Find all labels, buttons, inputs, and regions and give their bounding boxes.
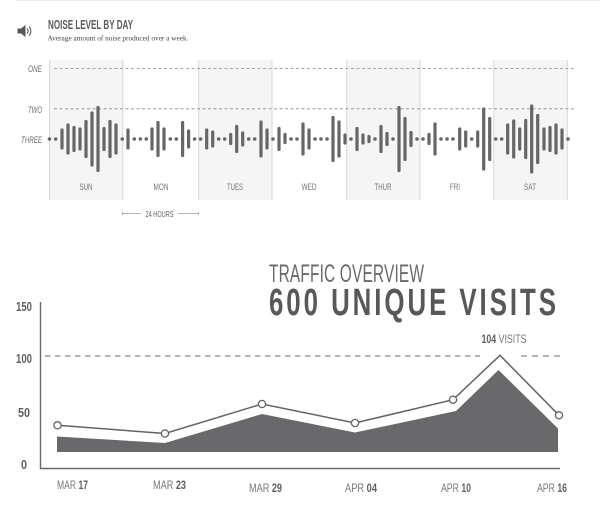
x axis labels: MAR 23 xyxy=(153,478,186,492)
area series xyxy=(57,370,558,452)
heading: noise level by day: NOISE LEVEL BY DAY xyxy=(48,18,133,32)
y axis labels: 0 xyxy=(21,457,27,472)
day labels: MON xyxy=(154,182,169,193)
line and area chart xyxy=(16,299,567,495)
panel: noise level by day xyxy=(18,18,574,219)
noise level labels xyxy=(21,64,42,146)
shaded day columns xyxy=(49,60,567,200)
x axis labels xyxy=(57,478,567,495)
line series xyxy=(58,355,559,434)
day labels: SAT xyxy=(524,182,536,193)
noise level labels: ONE xyxy=(28,64,42,75)
title: 600 unique visits: 600 UNIQUE VISITS xyxy=(269,281,556,323)
panel: traffic overview xyxy=(16,260,567,495)
scale: 24 hours: 24 HOURS xyxy=(146,209,174,219)
waveform bars xyxy=(62,106,562,172)
callout: 104 visits: 104 VISITS xyxy=(482,332,526,346)
noise level labels: TWO xyxy=(28,105,42,116)
y axis labels: 150 xyxy=(16,299,32,314)
x axis labels: APR 04 xyxy=(345,481,377,495)
reference line at 100 xyxy=(45,355,560,357)
day labels: WED xyxy=(302,182,317,193)
subtitle: Average amount of noise produced over a week. xyxy=(48,34,189,42)
x axis labels: MAR 17 xyxy=(57,478,88,492)
scale: 24 hours xyxy=(122,209,198,219)
y axis labels: 100 xyxy=(16,351,32,366)
icon: speaker xyxy=(18,25,31,37)
data points xyxy=(54,396,563,437)
y axis labels: 50 xyxy=(18,405,30,420)
day labels: TUES xyxy=(227,182,243,193)
day labels xyxy=(80,182,536,193)
waveform dots xyxy=(48,137,570,141)
noise level labels: THREE xyxy=(21,135,42,146)
x axis labels: APR 16 xyxy=(537,481,567,495)
x axis labels: MAR 29 xyxy=(249,481,282,495)
x axis labels: APR 10 xyxy=(441,481,471,495)
day labels: FRI xyxy=(450,182,460,193)
day labels: THUR xyxy=(374,182,392,193)
chart axes xyxy=(40,302,560,468)
day labels: SUN xyxy=(80,182,93,193)
y axis labels xyxy=(16,299,32,472)
title: traffic overview: TRAFFIC OVERVIEW xyxy=(269,260,424,288)
